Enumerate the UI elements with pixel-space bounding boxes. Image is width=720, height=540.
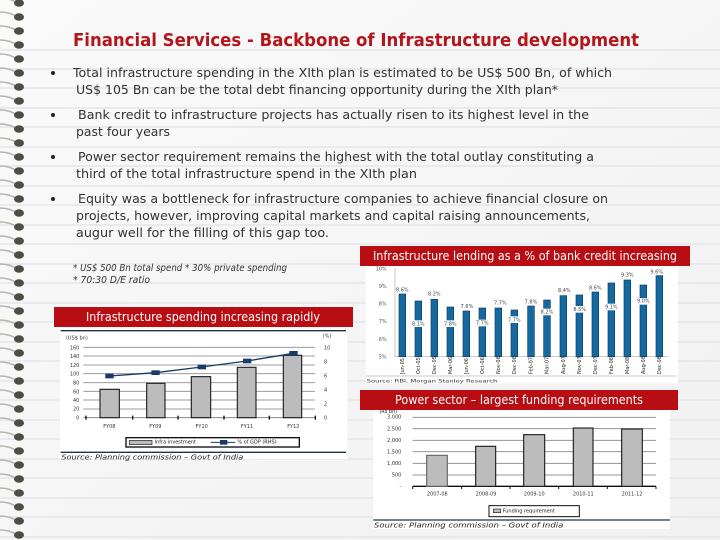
bullet: bank credit: Bank credit to infrastructure projects has actually risen to its highest level in the xyxy=(78,107,589,122)
footnote: * US$ 500 Bn total spend * 30% private spending xyxy=(73,263,287,274)
chart: infrastructure investment bars and GDP line: 140 xyxy=(70,354,79,360)
bullet: equity xyxy=(51,191,608,240)
chart: lending as a share of bank credit: Jun-05 xyxy=(400,358,406,375)
chart: infrastructure investment bars and GDP line: FY08 xyxy=(103,424,115,430)
chart: lending as a share of bank credit: 7.7% xyxy=(494,301,507,307)
banner: power sector heading: Power sector – largest funding requirements xyxy=(395,393,643,407)
chart: lending as a share of bank credit: Nov-06 xyxy=(496,356,502,374)
chart: lending as a share of bank credit: Dec-06 xyxy=(512,356,518,374)
chart: lending as a share of bank credit: Mar-08 xyxy=(625,357,631,374)
chart: lending as a share of bank credit: Source: RBI, Morgan Stanley Research xyxy=(367,378,497,384)
bullet: equity: projects, however, improving capital markets and capital raising announcements, xyxy=(76,208,590,223)
chart: lending as a share of bank credit: Jun-06 xyxy=(464,358,470,375)
chart: lending as a share of bank credit: 7.7% xyxy=(508,318,521,324)
chart: funding requirement bars: 2,000 xyxy=(387,438,401,444)
chart: lending as a share of bank credit: Dec-08 xyxy=(657,356,663,374)
chart: funding requirement bars: Source: Planning commission – Govt of India xyxy=(374,522,563,530)
bullet: equity: Equity was a bottleneck for infrastructure companies to achieve financial closure on xyxy=(78,191,608,206)
chart: lending as a share of bank credit: Aug-07 xyxy=(561,356,567,374)
chart: lending as a share of bank credit: 8.4% xyxy=(558,288,571,294)
chart: lending as a share of bank credit: 8.5% xyxy=(573,307,586,313)
chart: lending as a share of bank credit: 9.0% xyxy=(637,299,650,305)
banner: power sector heading xyxy=(360,390,678,410)
banner: infrastructure lending heading: Infrastructure lending as a % of bank credit increasing xyxy=(373,249,677,263)
chart: infrastructure investment bars and GDP line: (%) xyxy=(323,334,331,340)
bullet: total infrastructure spending: US$ 105 Bn can be the total debt financing opportunity during the XIth plan* xyxy=(76,82,558,97)
chart: infrastructure investment bars and GDP line: 80 xyxy=(73,380,79,386)
panel: infrastructure lending chart xyxy=(360,246,690,384)
chart: lending as a share of bank credit: Feb-08 xyxy=(609,357,615,374)
chart: lending as a share of bank credit: 8.6% xyxy=(589,286,602,292)
chart: lending as a share of bank credit: Mar-06 xyxy=(448,357,454,374)
chart: funding requirement bars: 2009-10 xyxy=(524,492,545,498)
icon: spiral notebook binding xyxy=(0,0,24,539)
chart: funding requirement bars: 500 xyxy=(392,472,401,478)
chart: lending as a share of bank credit: 7% xyxy=(379,319,387,325)
bullet: total infrastructure spending xyxy=(51,65,612,97)
text block: key bullet points xyxy=(51,65,612,240)
bullet: power sector: third of the total infrastructure spend in the XIth plan xyxy=(76,166,417,181)
chart: funding requirement bars: 2008-09 xyxy=(476,492,496,498)
chart: lending as a share of bank credit: 7.8% xyxy=(525,300,538,306)
chart: lending as a share of bank credit: 7.8% xyxy=(444,321,457,327)
chart: infrastructure investment bars and GDP line: Infra investment xyxy=(155,440,196,446)
chart: lending as a share of bank credit: 8.2% xyxy=(428,292,441,298)
chart: funding requirement bars: 2,500 xyxy=(387,426,401,432)
banner: infrastructure spending heading xyxy=(54,307,353,327)
chart: lending as a share of bank credit: 8.2% xyxy=(541,310,554,316)
chart: lending as a share of bank credit: Dec-05 xyxy=(432,356,438,374)
chart: lending as a share of bank credit: 9.3% xyxy=(621,273,634,279)
chart: infrastructure investment bars and GDP line xyxy=(60,328,347,461)
panel: infrastructure spending chart xyxy=(54,307,353,461)
chart: funding requirement bars: 1,000 xyxy=(387,461,401,467)
chart: lending as a share of bank credit: Nov-07 xyxy=(577,356,583,374)
chart: lending as a share of bank credit xyxy=(366,266,678,384)
chart: funding requirement bars xyxy=(373,409,670,530)
chart: lending as a share of bank credit: 7.7% xyxy=(476,321,489,327)
chart: funding requirement bars: 2010-11 xyxy=(573,492,594,498)
bullet: equity: augur well for the filling of this gap too. xyxy=(76,225,329,240)
chart: infrastructure investment bars and GDP line: 160 xyxy=(70,345,79,351)
chart: infrastructure investment bars and GDP line: 4 xyxy=(324,387,327,393)
chart: infrastructure investment bars and GDP line: 40 xyxy=(73,398,79,404)
chart: lending as a share of bank credit: 8.6% xyxy=(396,288,409,294)
chart: infrastructure investment bars and GDP line: 10 xyxy=(324,345,330,351)
chart: infrastructure investment bars and GDP line: 20 xyxy=(73,407,79,413)
bullet: total infrastructure spending: Total infrastructure spending in the XIth plan is estimated to be US$ 500 Bn, of which xyxy=(72,65,612,80)
chart: lending as a share of bank credit: 9.6% xyxy=(650,270,663,276)
chart: infrastructure investment bars and GDP line: FY11 xyxy=(241,424,253,430)
chart: infrastructure investment bars and GDP line: (US$ bn) xyxy=(66,335,88,341)
chart: infrastructure investment bars and GDP line: 6 xyxy=(324,373,327,379)
banner: infrastructure spending heading: Infrastructure spending increasing rapidly xyxy=(86,310,320,324)
chart: funding requirement bars: 2011-12 xyxy=(622,492,642,498)
chart: lending as a share of bank credit: 8.1% xyxy=(412,321,425,327)
chart: infrastructure investment bars and GDP line: 60 xyxy=(73,389,79,395)
chart: funding requirement bars: (Rs bn) xyxy=(379,409,397,415)
chart: lending as a share of bank credit: 10% xyxy=(376,267,387,273)
chart: lending as a share of bank credit: 8% xyxy=(379,301,387,307)
footnote: * 70:30 D/E ratio xyxy=(73,275,150,286)
chart: lending as a share of bank credit: Feb-07 xyxy=(529,357,535,374)
chart: lending as a share of bank credit: Oct-05 xyxy=(416,357,422,374)
chart: lending as a share of bank credit: Mar-07 xyxy=(545,357,551,374)
chart: infrastructure investment bars and GDP line: 0 xyxy=(324,415,327,421)
chart: lending as a share of bank credit: Dec-07 xyxy=(593,356,599,374)
chart: funding requirement bars: - xyxy=(400,484,402,490)
chart: funding requirement bars: 1,500 xyxy=(387,449,401,455)
chart: infrastructure investment bars and GDP line: FY09 xyxy=(149,424,161,430)
chart: funding requirement bars: Funding requirement xyxy=(503,508,555,514)
chart: infrastructure investment bars and GDP line: 120 xyxy=(70,363,79,369)
chart: lending as a share of bank credit: 5% xyxy=(379,355,387,361)
chart: funding requirement bars: 2007-08 xyxy=(427,492,448,498)
chart: lending as a share of bank credit: 6% xyxy=(379,337,387,343)
chart: infrastructure investment bars and GDP line: 8 xyxy=(324,359,327,365)
chart: infrastructure investment bars and GDP line: 2 xyxy=(324,401,327,407)
chart: infrastructure investment bars and GDP line: FY12 xyxy=(287,424,299,430)
bullet: bank credit: past four years xyxy=(76,124,170,139)
chart: infrastructure investment bars and GDP line: 0 xyxy=(76,415,79,421)
panel: power sector funding chart xyxy=(360,390,678,530)
chart: lending as a share of bank credit: 7.6% xyxy=(461,304,474,310)
title: Financial Services - Backbone of Infrastructure development xyxy=(73,30,639,51)
chart: lending as a share of bank credit: 9.1% xyxy=(605,305,618,311)
chart: infrastructure investment bars and GDP line: Source: Planning commission – Govt of India xyxy=(61,453,243,461)
bullet: bank credit xyxy=(51,107,589,139)
chart: lending as a share of bank credit: 9% xyxy=(379,284,387,290)
footnote xyxy=(73,263,287,286)
banner: infrastructure lending heading xyxy=(360,246,690,266)
chart: infrastructure investment bars and GDP line: % of GDP (RHS) xyxy=(237,440,277,446)
chart: lending as a share of bank credit: Oct-06 xyxy=(480,357,486,374)
chart: infrastructure investment bars and GDP line: 100 xyxy=(70,372,79,378)
bullet: power sector xyxy=(51,149,594,181)
bullet: power sector: Power sector requirement remains the highest with the total outlay constituting a xyxy=(78,149,594,164)
chart: lending as a share of bank credit: Aug-08 xyxy=(641,356,647,374)
chart: infrastructure investment bars and GDP line: FY10 xyxy=(196,424,208,430)
chart: funding requirement bars: 3,000 xyxy=(387,415,401,421)
